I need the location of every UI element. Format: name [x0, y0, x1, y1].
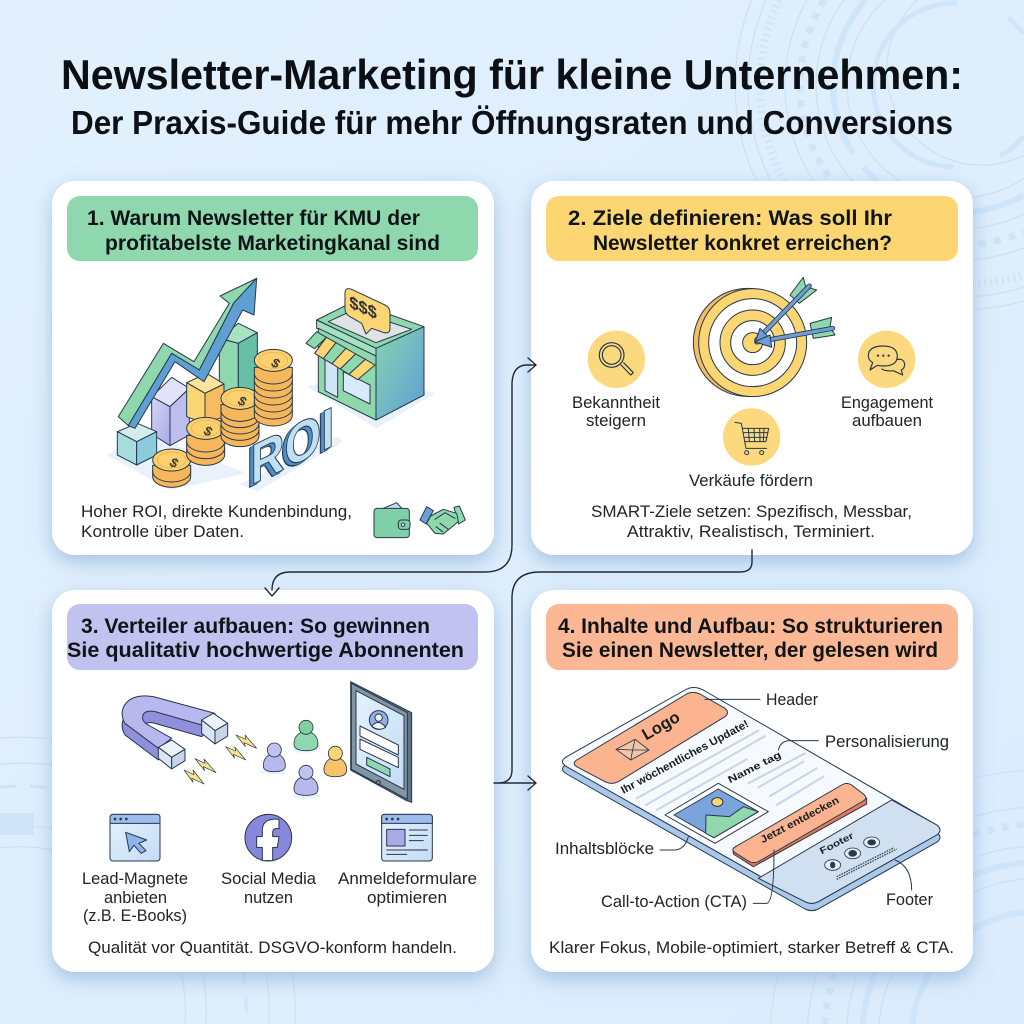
label: Anmeldeformulare optimieren — [338, 870, 477, 907]
heading: panel 1 — [67, 196, 478, 261]
heading: panel 4: 4. Inhalte und Aufbau: So strukturieren — [558, 614, 943, 638]
icon: chat bubbles — [858, 331, 915, 388]
illustration: growth chart, coins, ROI and shop — [107, 278, 465, 538]
icon: social media — [245, 814, 292, 861]
magnet — [122, 696, 228, 769]
heading: panel 1: 1. Warum Newsletter für KMU der — [87, 206, 421, 230]
text: panel 1 summary — [81, 503, 352, 541]
label: Header: Header — [766, 691, 818, 709]
label: Bekanntheit steigern — [572, 394, 660, 430]
panel: 1 Warum Newsletter — [52, 181, 494, 555]
heading: panel 1: profitabelste Marketingkanal sind — [105, 231, 440, 255]
label: Bekanntheit steigern: steigern — [586, 412, 646, 430]
label: Lead-Magnete — [82, 870, 188, 925]
label: Lead-Magnete: (z.B. E-Books) — [83, 907, 187, 925]
ROI letters: ROI — [249, 396, 332, 499]
text: panel 1 summary: Kontrolle über Daten. — [81, 523, 244, 541]
icon: signup form window — [382, 814, 432, 861]
icon: shopping cart — [723, 408, 780, 466]
label: Anmeldeformulare optimieren: Anmeldeformulare — [338, 870, 477, 888]
blue cube — [117, 423, 157, 465]
purple bar — [152, 377, 189, 446]
text: panel 2 summary: SMART-Ziele setzen: Spezifisch, Messbar, — [591, 503, 912, 521]
footer content: Footer — [818, 830, 856, 856]
label: Social Media nutzen: Social Media — [221, 870, 317, 888]
title: Der Praxis-Guide für mehr Öffnungsraten und Conversions — [71, 104, 953, 141]
illustration: isometric newsletter mockup — [562, 687, 940, 911]
people — [261, 720, 347, 799]
coin stacks — [153, 349, 292, 487]
growth arrow — [118, 278, 257, 428]
icon: wallet — [374, 503, 410, 538]
header band — [574, 692, 727, 783]
label: Bekanntheit steigern: Bekanntheit — [572, 394, 660, 412]
icon: browser with cursor — [110, 814, 160, 861]
shop — [306, 289, 424, 420]
arrows in target — [755, 277, 835, 347]
tablet — [351, 682, 412, 802]
text: panel 2 summary — [591, 503, 912, 541]
icon: magnifier — [588, 331, 645, 388]
image block — [665, 783, 768, 843]
panel: 4 Inhalte und Aufbau — [531, 590, 973, 972]
content lines — [637, 731, 823, 810]
heading: panel 4: Sie einen Newsletter, der gelesen wird — [562, 638, 938, 662]
newsletter headline: Ihr wöchentliches Update! — [619, 718, 751, 797]
heading: panel 3 — [67, 604, 478, 670]
heading: panel 2 — [546, 196, 958, 261]
CTA button — [733, 783, 867, 867]
label: Personalisierung: Personalisierung — [825, 733, 949, 751]
illustration: target and goal icons — [588, 277, 915, 466]
leader lines — [660, 699, 912, 903]
text: panel 3 summary: Qualität vor Quantität. DSGVO-konform handeln. — [88, 939, 457, 957]
panel: 3 Verteiler aufbauen — [52, 590, 494, 972]
heading: panel 4 — [546, 604, 958, 670]
newsletter card — [562, 687, 940, 911]
label: Social Media nutzen: nutzen — [244, 889, 293, 907]
title: Newsletter-Marketing für kleine Unternehmen: — [61, 51, 963, 98]
footer content — [818, 830, 897, 879]
header band: Logo — [638, 707, 683, 744]
lightning bolts — [184, 735, 257, 784]
personalised name: Name tag — [726, 750, 783, 786]
label: Engagement aufbauen: Engagement — [841, 394, 933, 412]
label: Anmeldeformulare optimieren: optimieren — [367, 889, 447, 907]
arrow: panel 1 to 2 and 3 — [265, 358, 536, 596]
label: Lead-Magnete: anbieten — [104, 889, 167, 907]
yellow bar — [187, 373, 224, 423]
label: Call-to-Action: Call-to-Action (CTA) — [601, 893, 747, 911]
label: Footer: Footer — [886, 891, 933, 909]
heading: panel 2: 2. Ziele definieren: Was soll Ihr — [568, 206, 893, 230]
arrow: panel 2 to 4 — [494, 550, 752, 790]
label: Verkäufe fördern: Verkäufe fördern — [689, 472, 813, 490]
label: Lead-Magnete: Lead-Magnete — [82, 870, 188, 888]
text: panel 2 summary: Attraktiv, Realistisch, Terminiert. — [627, 523, 875, 541]
heading: panel 2: Newsletter konkret erreichen? — [593, 231, 892, 255]
green bar — [219, 323, 257, 393]
heading: panel 3: Sie qualitativ hochwertige Abonnenten — [67, 638, 464, 662]
ROI letters: ROI — [251, 394, 334, 498]
heading: panel 3: 3. Verteiler aufbauen: So gewinnen — [81, 614, 430, 638]
panel: 2 Ziele definieren — [531, 181, 973, 555]
ROI letters: ROI — [247, 397, 330, 501]
illustration: magnet, people and tablet — [110, 682, 432, 861]
target — [693, 288, 807, 397]
text: panel 4 summary: Klarer Fokus, Mobile-optimiert, starker Betreff & CTA. — [549, 939, 954, 957]
shop sign: $$$ — [349, 292, 377, 323]
label: Social Media nutzen — [221, 870, 317, 907]
icon: handshake — [420, 506, 465, 534]
title — [61, 51, 963, 141]
label: Engagement aufbauen — [841, 394, 933, 430]
text: panel 1 summary: Hoher ROI, direkte Kundenbindung, — [81, 503, 352, 521]
label: Engagement aufbauen: aufbauen — [852, 412, 922, 430]
label: Inhaltsblöcke: Inhaltsblöcke — [555, 840, 654, 858]
CTA button: Jetzt entdecken — [759, 795, 841, 846]
